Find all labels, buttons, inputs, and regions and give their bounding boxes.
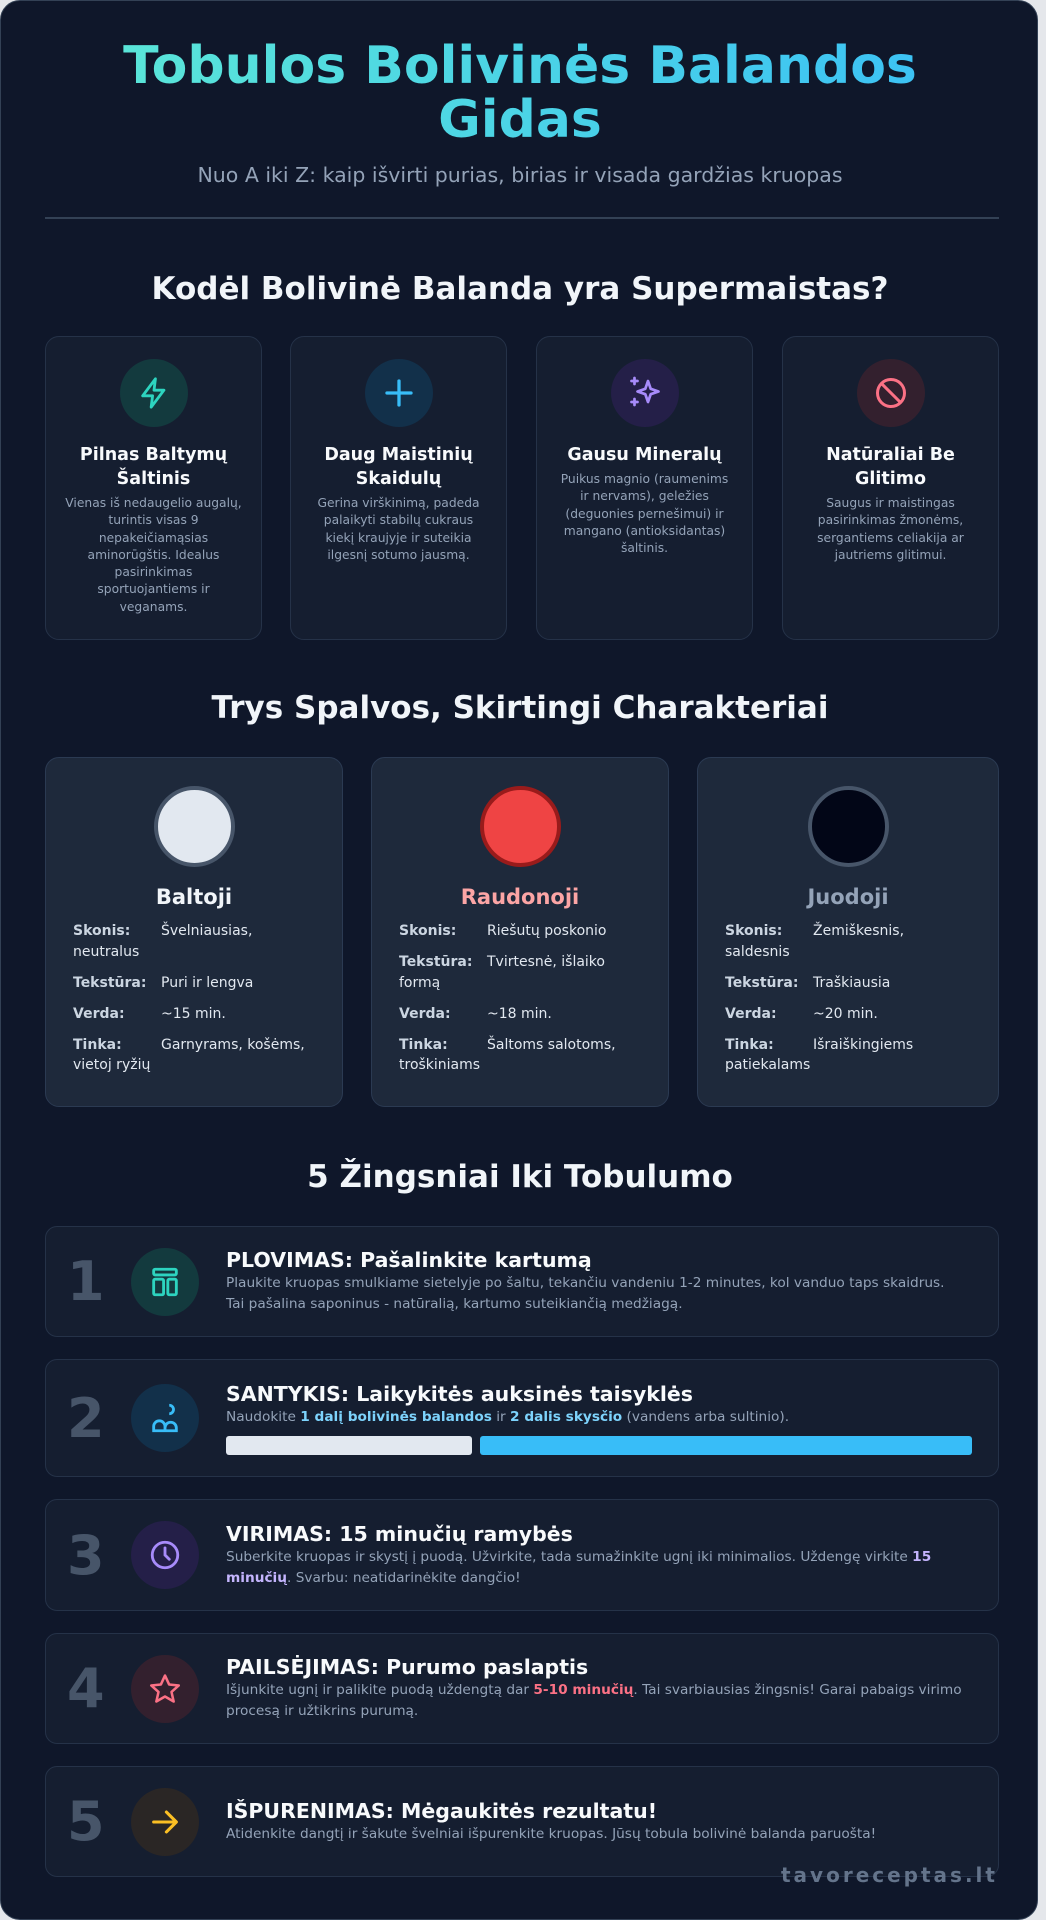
icon: lightning bbox=[120, 359, 188, 427]
panel: fiber: ilgesnį sotumo jausmą. bbox=[327, 548, 470, 562]
panel: protein: aminorūgštis. Idealus bbox=[88, 548, 219, 562]
step 1 bbox=[45, 1226, 999, 1337]
title bbox=[1, 39, 1039, 147]
step 4: Išjunkite ugnį ir palikite puodą uždengtą dar 5-10 minučių. Tai svarbiausias žingsnis! Garai pabaigs virimo bbox=[226, 1682, 962, 1698]
step 3: 3 bbox=[67, 1524, 105, 1586]
step 3: minučių. Svarbu: neatidarinėkite dangčio! bbox=[226, 1570, 521, 1586]
step 1: Tai pašalina saponinus - natūralią, kartumo suteikiančią medžiagą. bbox=[226, 1296, 683, 1312]
icon: red dot bbox=[480, 786, 560, 867]
icon: ban bbox=[856, 359, 924, 427]
panel: minerals: mangano (antioksidantas) bbox=[564, 524, 725, 538]
panel: gluten free: Glitimo bbox=[855, 469, 926, 489]
panel: red: Raudonoji bbox=[461, 885, 579, 909]
step 4: 4 bbox=[67, 1657, 105, 1720]
panel: protein: Pilnas Baltymų bbox=[80, 445, 227, 465]
panel: red bbox=[371, 757, 669, 1107]
panel: white: Verda: bbox=[73, 1006, 125, 1022]
panel: white: Puri ir lengva bbox=[161, 974, 253, 990]
step 1: Plaukite kruopas smulkiame sietelyje po šaltu, tekančiu vandeniu 1-2 minutes, kol vanduo taps skaidrus. bbox=[226, 1275, 945, 1291]
panel: black: Verda: bbox=[725, 1006, 777, 1022]
panel: white bbox=[45, 757, 343, 1107]
panel: minerals: šaltinis. bbox=[621, 541, 668, 555]
ratio bar bbox=[226, 1436, 972, 1455]
panel: white: Švelniausias, neutralus bbox=[73, 923, 252, 960]
panel: red: Tinka: bbox=[399, 1036, 448, 1052]
icon: white dot bbox=[154, 786, 234, 867]
step 4 bbox=[45, 1633, 999, 1744]
step 2: SANTYKIS: Laikykitės auksinės taisyklės bbox=[226, 1382, 693, 1406]
panel: black: Tinka: bbox=[725, 1036, 774, 1052]
panel: protein: sportuojantiems ir bbox=[97, 582, 210, 596]
panel: minerals: Puikus magnio (raumenims bbox=[561, 472, 728, 486]
icon: plus bbox=[364, 359, 432, 427]
panel: fiber: palaikyti stabilų cukraus bbox=[324, 513, 473, 527]
panel: minerals: Gausu Mineralų bbox=[567, 445, 722, 465]
panel: black: Išraiškingiems patiekalams bbox=[725, 1036, 913, 1073]
panel: white: ~15 min. bbox=[161, 1006, 226, 1022]
panel: black: Juodoji bbox=[807, 885, 889, 909]
panel: red: Šaltoms salotoms, troškiniams bbox=[399, 1036, 616, 1073]
panel: protein: Vienas iš nedaugelio augalų, bbox=[65, 496, 242, 510]
icon: sparkles bbox=[610, 359, 678, 427]
panel: gluten free: Saugus ir maistingas bbox=[826, 496, 955, 510]
step 5: IŠPURENIMAS: Mėgaukitės rezultatu! bbox=[226, 1798, 657, 1822]
step 5: 5 bbox=[67, 1790, 105, 1853]
panel: gluten free: Natūraliai Be bbox=[826, 445, 955, 465]
step 3 bbox=[45, 1499, 999, 1611]
panel: red: Riešutų poskonio bbox=[487, 923, 606, 939]
panel: red: ~18 min. bbox=[487, 1006, 552, 1022]
step 3: Suberkite kruopas ir skystį į puodą. Užvirkite, tada sumažinkite ugnį iki minimalios. Uždengę virkite 15 bbox=[226, 1548, 931, 1564]
step 2: Naudokite 1 dalį bolivinės balandos ir 2 dalis skysčio (vandens arba sultinio). bbox=[226, 1408, 789, 1424]
panel: black: Žemiškesnis, saldesnis bbox=[725, 923, 904, 960]
icon: black dot bbox=[808, 786, 888, 867]
panel: gluten free: pasirinkimas žmonėms, bbox=[818, 513, 963, 527]
panel: minerals bbox=[536, 336, 753, 640]
icon: arrow bbox=[131, 1788, 199, 1856]
panel: black: ~20 min. bbox=[813, 1006, 878, 1022]
icon: sieve bbox=[131, 1248, 199, 1316]
panel: white: Garnyrams, košėms, vietoj ryžių bbox=[73, 1036, 305, 1073]
heading: steps: 5 Žingsniai Iki Tobulumo bbox=[307, 1159, 733, 1195]
panel: minerals: ir nervams), geležies bbox=[580, 489, 709, 503]
panel: fiber: Daug Maistinių bbox=[324, 445, 473, 465]
heading: superfood: Kodėl Bolivinė Balanda yra Supermaistas? bbox=[152, 271, 888, 307]
panel: red: Tvirtesnė, išlaiko formą bbox=[399, 954, 605, 990]
panel: black: Traškiausia bbox=[813, 974, 890, 990]
step 4: procesą ir užtikrins purumą. bbox=[226, 1703, 418, 1719]
panel: fiber bbox=[290, 336, 507, 640]
panel: gluten free bbox=[782, 336, 999, 640]
panel: black: Skonis: bbox=[725, 923, 782, 939]
panel: gluten free: sergantiems celiakija ar bbox=[817, 531, 964, 545]
panel: white: Tinka: bbox=[73, 1036, 122, 1052]
subtitle: Nuo A iki Z: kaip išvirti purias, birias ir visada gardžias kruopas bbox=[197, 163, 843, 187]
panel: protein: nepakeičiamąsias bbox=[99, 531, 208, 545]
panel: fiber: Skaidulų bbox=[356, 469, 441, 489]
title: Gidas bbox=[438, 90, 602, 150]
step 1: PLOVIMAS: Pašalinkite kartumą bbox=[226, 1248, 592, 1272]
icon: star bbox=[131, 1654, 199, 1722]
panel: black bbox=[697, 757, 999, 1107]
panel: gluten free: jautriems glitimui. bbox=[835, 548, 946, 562]
step 2 bbox=[45, 1359, 999, 1477]
heading: colours: Trys Spalvos, Skirtingi Charakteriai bbox=[212, 690, 828, 726]
panel: white: Baltoji bbox=[156, 885, 232, 909]
title: Tobulos Bolivinės Balandos bbox=[123, 36, 917, 96]
panel: black: Tekstūra: bbox=[725, 974, 798, 990]
icon: clock bbox=[131, 1521, 199, 1589]
step 4: PAILSĖJIMAS: Purumo paslaptis bbox=[226, 1655, 588, 1679]
step 2: 2 bbox=[67, 1386, 105, 1450]
panel: fiber: Gerina virškinimą, padeda bbox=[317, 496, 480, 510]
step 3: VIRIMAS: 15 minučių ramybės bbox=[226, 1522, 573, 1546]
panel: protein: turintis visas 9 bbox=[108, 513, 199, 527]
panel: protein bbox=[45, 336, 262, 640]
panel: red: Skonis: bbox=[399, 923, 456, 939]
watermark: tavoreceptas.lt bbox=[781, 1863, 998, 1887]
step 1: 1 bbox=[67, 1250, 105, 1313]
step 5: Atidenkite dangtį ir šakute švelniai išpurenkite kruopas. Jūsų tobula bolivinė balanda paruošta! bbox=[226, 1826, 876, 1842]
panel: protein: veganams. bbox=[120, 600, 187, 614]
panel: white: Skonis: bbox=[73, 923, 130, 939]
panel: minerals: (deguonies pernešimui) ir bbox=[565, 507, 724, 521]
panel: fiber: kiekį kraujyje ir suteikia bbox=[325, 531, 472, 545]
panel: red: Verda: bbox=[399, 1006, 451, 1022]
panel: protein: pasirinkimas bbox=[115, 565, 192, 579]
icon: ratio bbox=[131, 1384, 199, 1452]
panel: white: Tekstūra: bbox=[73, 974, 146, 990]
step 5 bbox=[45, 1766, 999, 1877]
panel: red: Tekstūra: bbox=[399, 954, 472, 970]
panel: protein: Šaltinis bbox=[117, 469, 190, 489]
